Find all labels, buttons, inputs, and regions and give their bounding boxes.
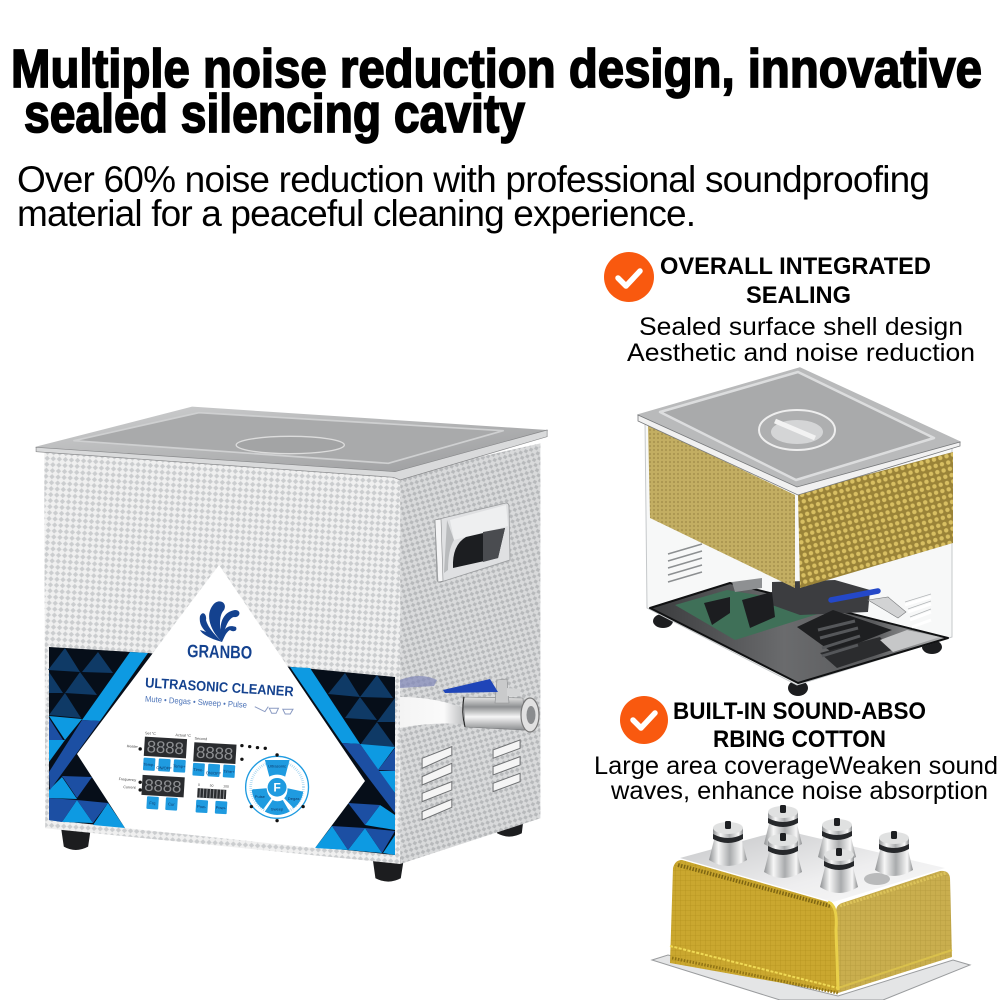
function dial: Pulse: [255, 794, 266, 799]
side handle: [435, 503, 510, 582]
heading: overall integrated sealing: OVERALL INTEGRATED: [660, 253, 931, 280]
button labels: Time-: [193, 767, 204, 772]
text: sealing description: [627, 313, 975, 367]
check icon: sealing: [604, 252, 654, 302]
product name: ULTRASONIC CLEANER: [145, 674, 294, 699]
text: cotton description: waves, enhance noise absorption: [610, 777, 988, 805]
display labels: Actual °C: [175, 733, 191, 738]
foot: front right: [372, 857, 404, 882]
filler hole: [864, 873, 890, 885]
transformer blocks: [704, 578, 775, 628]
blue buttons: [141, 758, 235, 815]
side vents: [422, 740, 520, 820]
panel text and controls: [117, 674, 520, 822]
title: [11, 39, 982, 144]
indicator dots: [138, 744, 267, 792]
fan assembly: [797, 610, 940, 668]
button labels: ON/OFF: [156, 765, 172, 771]
valve and blue lever: [831, 591, 931, 627]
electronics mass: [772, 580, 870, 615]
lid: [638, 368, 960, 495]
gold right panel: [798, 452, 953, 588]
text: cotton description: Large area coverageWeaken sound: [594, 752, 998, 780]
tank top plate: [680, 830, 945, 902]
control panel graphic: [48, 647, 395, 855]
base plate: [650, 583, 948, 683]
display labels: Heater: [127, 744, 139, 749]
logo: granbo splash: GRANBO: [187, 641, 252, 663]
text: sealing description: Sealed surface shell design: [639, 313, 963, 341]
tank right side: [836, 871, 952, 993]
heading: built-in sound-absorbing cotton: [673, 698, 926, 753]
display: frequency: 8888: [144, 776, 182, 797]
function dial: F: [273, 781, 281, 795]
circuit board: [675, 590, 837, 640]
function dial: Ultrasonic: [268, 764, 286, 769]
display: second: 8888: [196, 743, 234, 764]
gold tank with transducers: [652, 805, 970, 1000]
cutaway illustration: sealed shell: [638, 368, 960, 696]
function dial: Degas: [288, 796, 299, 801]
display labels: [118, 730, 207, 794]
foot: front left: [60, 823, 92, 850]
power bar: 100: [223, 784, 229, 789]
display labels: Current: [123, 785, 136, 790]
body, feet and lid: [36, 407, 547, 882]
white diamond label: [77, 565, 365, 848]
function dial: [246, 753, 309, 822]
power bar: 0: [198, 783, 200, 787]
subtitle: [17, 159, 930, 234]
button labels: Time+: [223, 769, 235, 774]
button labels: ON/OFF: [206, 770, 222, 776]
button labels: Frq: [149, 800, 156, 806]
power bar: 50: [210, 784, 214, 788]
heading: overall integrated sealing: [660, 253, 931, 309]
subtitle: material for a peaceful cleaning experience.: [17, 193, 696, 234]
shell vents: [668, 544, 702, 582]
logo: granbo splash: [187, 601, 252, 663]
button labels: Pow+: [216, 805, 227, 811]
water valve: [400, 676, 539, 732]
text: sealing description: Aesthetic and noise reduction: [627, 339, 975, 367]
button labels: [141, 762, 235, 811]
gold left panel: [648, 425, 795, 588]
tank left side: [670, 860, 838, 993]
function dial: Sweep: [271, 807, 284, 812]
clear shell: [645, 420, 952, 685]
front face: [44, 450, 400, 864]
display labels: Set °C: [145, 731, 156, 736]
button labels: Pow-: [197, 804, 207, 809]
subtitle: Over 60% noise reduction with professional soundproofing: [17, 159, 930, 200]
heading: built-in sound-absorbing cotton: BUILT-IN SOUND-ABSO: [673, 698, 926, 725]
flange: [652, 955, 970, 1000]
display labels: Frequency: [119, 777, 136, 782]
transducers: [709, 805, 913, 893]
button labels: Cur: [168, 801, 175, 807]
heading: built-in sound-absorbing cotton: RBING COTTON: [713, 726, 886, 753]
control displays and buttons: [117, 730, 237, 815]
text: cotton description: [594, 752, 998, 805]
tank rim highlights: [678, 865, 830, 906]
display: set temperature: 8888: [146, 737, 184, 758]
title: sealed silencing cavity: [24, 84, 525, 144]
mode list: Mute • Degas • Sweep • Pulse: [145, 694, 248, 710]
button labels: Temp+: [173, 763, 186, 769]
power bar: [197, 783, 229, 799]
feet: [653, 614, 942, 696]
check icon: cotton: [620, 696, 668, 744]
foot: back right: [495, 813, 524, 837]
heading: overall integrated sealing: SEALING: [746, 282, 851, 309]
button labels: Temp-: [143, 762, 155, 767]
right side face: [400, 443, 540, 864]
display labels: Second: [194, 737, 207, 741]
mode glyphs: [255, 707, 293, 714]
main product: ultrasonic cleaner: [36, 407, 547, 882]
lid: [36, 407, 547, 480]
